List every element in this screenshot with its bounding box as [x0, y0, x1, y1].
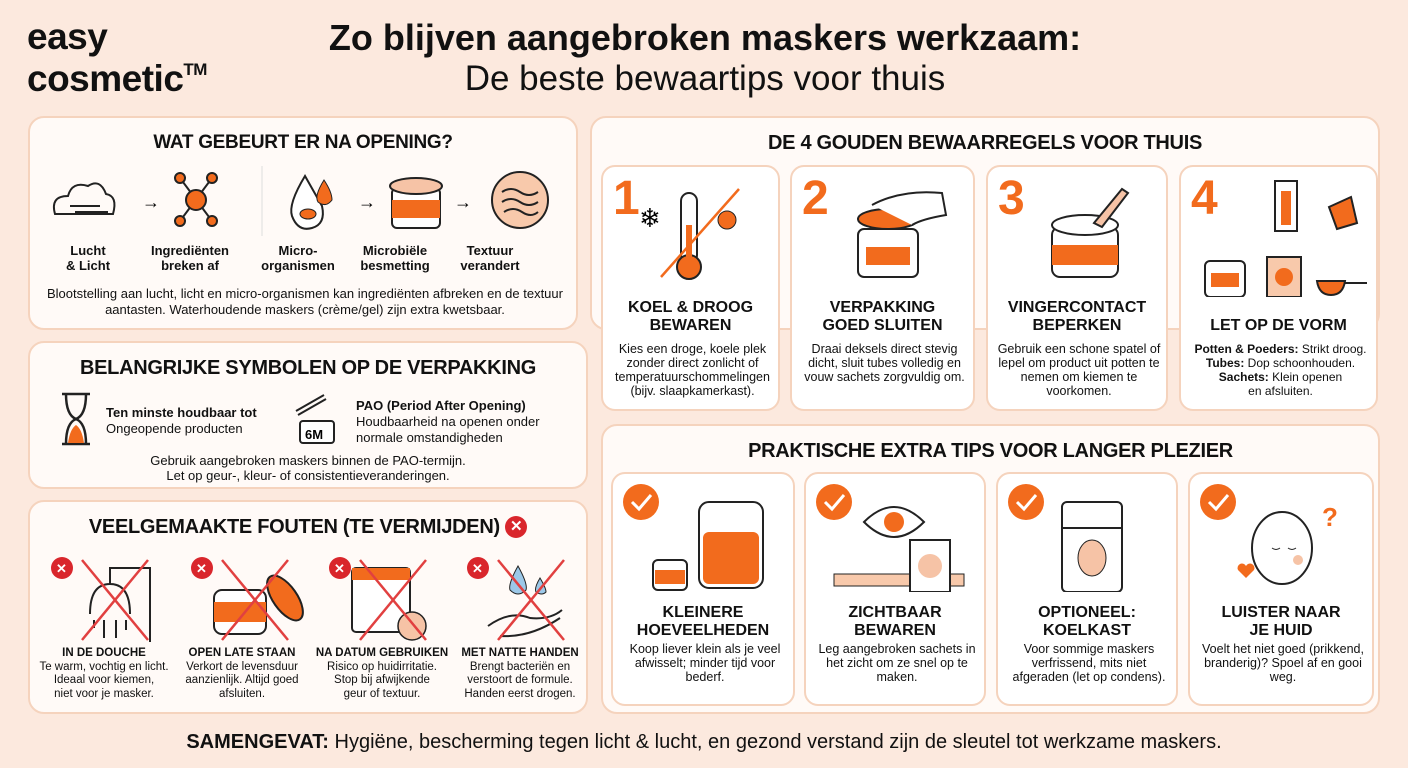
tip card 3: Voor sommige maskers verfrissend, mits niet afgeraden (let op condens). — [1013, 642, 1165, 684]
title: De beste bewaartips voor thuis — [465, 59, 945, 98]
icon: hourglass — [62, 392, 90, 446]
panel: fouten: Stop bij afwijkende — [334, 674, 430, 686]
mistake texts: niet voor je masker. — [54, 688, 154, 700]
card 2: 2 — [802, 172, 829, 225]
panel: fouten: Handen eerst drogen. — [464, 688, 576, 700]
panel: symbolen — [28, 341, 588, 489]
mistake texts: Te warm, vochtig en licht. — [39, 660, 169, 672]
card 4: 4 — [1191, 172, 1218, 225]
card 2: VERPAKKING — [830, 299, 935, 316]
icon: thermometer: ❄ — [639, 203, 661, 233]
icon: spatula jar — [1051, 188, 1130, 278]
heading: ✕ — [510, 518, 522, 535]
card 2: Draai deksels direct stevig dicht, sluit tubes volledig en vouw sachets zorgvuldig om. — [804, 342, 965, 384]
icon: thermometer — [639, 188, 740, 280]
text — [150, 453, 466, 483]
icon: closing jar — [857, 191, 948, 278]
card 1: BEWAREN — [650, 317, 731, 334]
tip card 4: JE HUID — [1249, 622, 1313, 639]
panel: 4 gouden bewaarregels — [590, 116, 1380, 330]
heading: DE 4 GOUDEN BEWAARREGELS VOOR THUIS — [768, 132, 1202, 154]
labels: & Licht — [66, 258, 110, 273]
card 3: 3 — [998, 172, 1025, 225]
tip card 4: Voelt het niet goed (prikkend, branderig)? Spoel af en gooi weg. — [1202, 642, 1364, 684]
panel: fouten: aanzienlijk. Altijd goed — [185, 674, 299, 686]
card 1: 1 — [613, 172, 640, 225]
panel: fouten: verstoort de formule. — [467, 674, 573, 686]
tip card 4 — [1188, 472, 1374, 706]
panel: praktische extra tips — [601, 424, 1380, 714]
card 1 — [601, 165, 780, 411]
card 4 — [1179, 165, 1378, 411]
tip card 4: ? — [1322, 502, 1338, 532]
text: Blootstelling aan lucht, licht en micro-organismen kan ingrediënten afbreken en de textuur aantasten. Waterhoudende maskers (crème/gel) zijn extra kwetsbaar. — [47, 286, 563, 317]
panel: fouten: Verkort de levensduur — [186, 660, 298, 672]
tip card 1: KLEINERE — [663, 604, 743, 621]
PAO text: normale omstandigheden — [356, 430, 503, 445]
card 3 — [986, 165, 1168, 411]
panel: fouten: OPEN LATE STAAN — [189, 647, 295, 659]
panel: wat gebeurt er na opening: besmetting — [360, 258, 430, 273]
icon: package shapes — [1204, 180, 1367, 297]
panel: wat gebeurt er na opening: organismen — [261, 258, 335, 273]
card 3: Gebruik een schone spatel of lepel om product uit potten te nemen om kiemen te voorkomen. — [998, 342, 1160, 398]
card 4: LET OP DE VORM — [1210, 317, 1347, 334]
mistake texts: IN DE DOUCHE — [62, 647, 146, 659]
panel: fouten — [28, 500, 588, 714]
card 4: Potten & Poeders: Strikt droog. — [1194, 342, 1367, 356]
process icons: → — [142, 192, 160, 212]
card 1: KOEL & DROOG — [628, 299, 753, 316]
logo: easy — [27, 16, 107, 57]
tip card 1: HOEVEELHEDEN — [637, 622, 769, 639]
mistake texts — [39, 647, 169, 700]
text: Let op geur-, kleur- of consistentieveranderingen. — [166, 468, 450, 483]
best before — [106, 405, 257, 436]
panel: wat gebeurt er na opening: Ingrediënten — [151, 243, 229, 258]
panel: fouten: Risico op huidirritatie. — [327, 660, 437, 672]
tip card 2 — [804, 472, 986, 706]
mistake icons: ✕ — [196, 561, 207, 576]
mistake icons: ✕ — [472, 561, 483, 576]
logo — [27, 16, 207, 99]
icon: PAO — [296, 394, 335, 444]
tip card 2: ZICHTBAAR — [848, 604, 942, 621]
card 4: en afsluiten. — [1248, 384, 1313, 398]
card 4: Sachets: Klein openen — [1219, 370, 1342, 384]
mistake texts: Ideaal voor kiemen, — [54, 674, 154, 686]
panel: wat gebeurt er na opening: verandert — [460, 258, 520, 273]
card 3: BEPERKEN — [1033, 317, 1121, 334]
best before: Ten minste houdbaar tot — [106, 405, 257, 420]
card 4: Tubes: Dop schoonhouden. — [1206, 356, 1355, 370]
heading: VEELGEMAAKTE FOUTEN (TE VERMIJDEN) — [89, 516, 500, 538]
tip card 4: LUISTER NAAR — [1221, 604, 1341, 621]
labels: Lucht — [70, 243, 106, 258]
PAO text: Houdbaarheid na openen onder — [356, 414, 540, 429]
logo: cosmeticTM — [27, 58, 207, 99]
PAO text — [356, 398, 540, 445]
tip card 3: KOELKAST — [1043, 622, 1131, 639]
panel: wat gebeurt er na opening: Microbiële — [363, 243, 427, 258]
process icons: → — [358, 192, 376, 212]
panel: wat gebeurt er na opening — [28, 116, 578, 330]
card 2: GOED SLUITEN — [822, 317, 942, 334]
PAO text: PAO (Period After Opening) — [356, 398, 526, 413]
heading: PRAKTISCHE EXTRA TIPS VOOR LANGER PLEZIER — [748, 440, 1233, 462]
panel: fouten: Brengt bacteriën en — [470, 660, 570, 672]
card 3: VINGERCONTACT — [1008, 299, 1146, 316]
mistake icons: ✕ — [334, 561, 345, 576]
tip card 1 — [611, 472, 795, 706]
panel: fouten: afsluiten. — [219, 688, 265, 700]
card 2 — [790, 165, 975, 411]
tip card 2: BEWAREN — [854, 622, 936, 639]
process icons — [52, 166, 549, 236]
title: Zo blijven aangebroken maskers werkzaam: — [329, 17, 1081, 58]
tip card 3 — [996, 472, 1178, 706]
panel: fouten: NA DATUM GEBRUIKEN — [316, 647, 448, 659]
panel: fouten: geur of textuur. — [344, 688, 420, 700]
tip card 2: Leg aangebroken sachets in het zicht om ze snel op te maken. — [818, 642, 976, 684]
mistake icons: ✕ — [56, 561, 67, 576]
heading: WAT GEBEURT ER NA OPENING? — [153, 132, 453, 153]
card 1: Kies een droge, koele plek zonder direct zonlicht of temperatuurschommelingen (bijv. slaapkamerkast). — [615, 342, 770, 398]
best before: Ongeopende producten — [106, 421, 243, 436]
heading: BELANGRIJKE SYMBOLEN OP DE VERPAKKING — [80, 357, 536, 379]
panel: wat gebeurt er na opening: breken af — [161, 258, 219, 273]
icon: PAO: 6M — [305, 427, 323, 442]
panel: wat gebeurt er na opening: Micro- — [278, 243, 318, 258]
title — [329, 17, 1081, 98]
tip card 3: OPTIONEEL: — [1038, 604, 1136, 621]
labels — [66, 243, 110, 273]
mistake icons — [51, 557, 565, 642]
footer summary: SAMENGEVAT: Hygiëne, bescherming tegen licht & lucht, en gezond verstand zijn de sleutel tot werkzame maskers. — [186, 731, 1222, 753]
text: Gebruik aangebroken maskers binnen de PAO-termijn. — [150, 453, 466, 468]
panel: fouten: MET NATTE HANDEN — [461, 647, 579, 659]
process icons: → — [454, 192, 472, 212]
tip card 1: Koop liever klein als je veel afwisselt; minder tijd voor bederf. — [630, 642, 780, 684]
panel: wat gebeurt er na opening: Textuur — [467, 243, 513, 258]
